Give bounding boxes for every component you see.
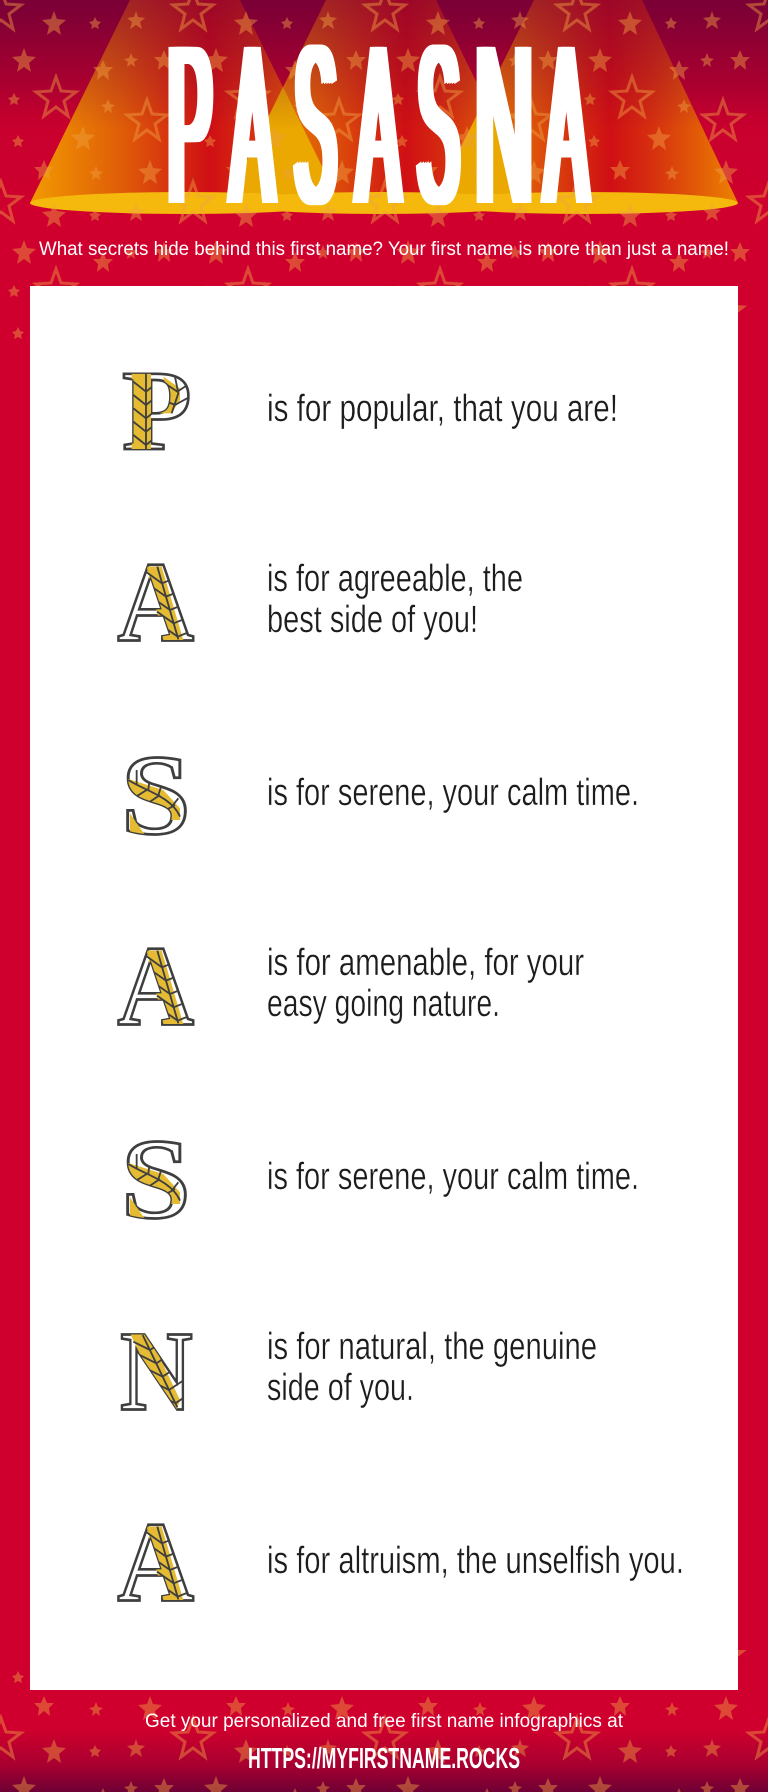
title: A [545, 0, 587, 252]
icon: letter A [117, 563, 194, 642]
text: P line: is for popular, that you are! [267, 388, 618, 430]
text: A line 2: best side of you! [267, 599, 478, 641]
text: S line: is for serene, your calm time. [267, 1156, 639, 1198]
icon: letter P [122, 372, 190, 450]
icon: letter S: S [121, 731, 191, 858]
subtitle: What secrets hide behind this first name? Your first name is more than just a name! [39, 239, 729, 260]
icon: letter A: A [117, 1499, 194, 1626]
title: A [357, 0, 399, 252]
footer url: HTTPS://MYFIRSTNAME.ROCKS [248, 1743, 520, 1775]
icon: letter P: P [122, 347, 192, 474]
spotlights [0, 0, 768, 214]
white panel [30, 286, 738, 1690]
text: N line: is for natural, the genuine [267, 1326, 597, 1368]
icon: letter N [120, 1333, 192, 1411]
icon: letter N: N [120, 1307, 193, 1434]
icon: letter S [126, 756, 187, 836]
title: A [231, 0, 273, 252]
star pattern bottom [0, 1650, 768, 1792]
text: N line 2: side of you. [267, 1367, 414, 1409]
text: A line: is for amenable, for your [267, 942, 584, 984]
text: A line 2: easy going nature. [267, 983, 500, 1025]
icon: letter A: A [117, 539, 194, 666]
icon: letter A: A [117, 923, 194, 1050]
title: N [475, 0, 533, 252]
star pattern top [0, 0, 768, 340]
icon: letter S [126, 1140, 187, 1220]
title: P [168, 0, 212, 252]
title: S [418, 0, 459, 252]
title: S [295, 0, 336, 252]
icon: letter S: S [121, 1115, 191, 1242]
icon: letter A [117, 947, 194, 1026]
footer text: Get your personalized and free first name infographics at [145, 1711, 624, 1732]
title [168, 0, 592, 252]
text: A line: is for agreeable, the [267, 558, 523, 600]
text: S line: is for serene, your calm time. [267, 772, 639, 814]
icon: letter A [117, 1523, 194, 1602]
